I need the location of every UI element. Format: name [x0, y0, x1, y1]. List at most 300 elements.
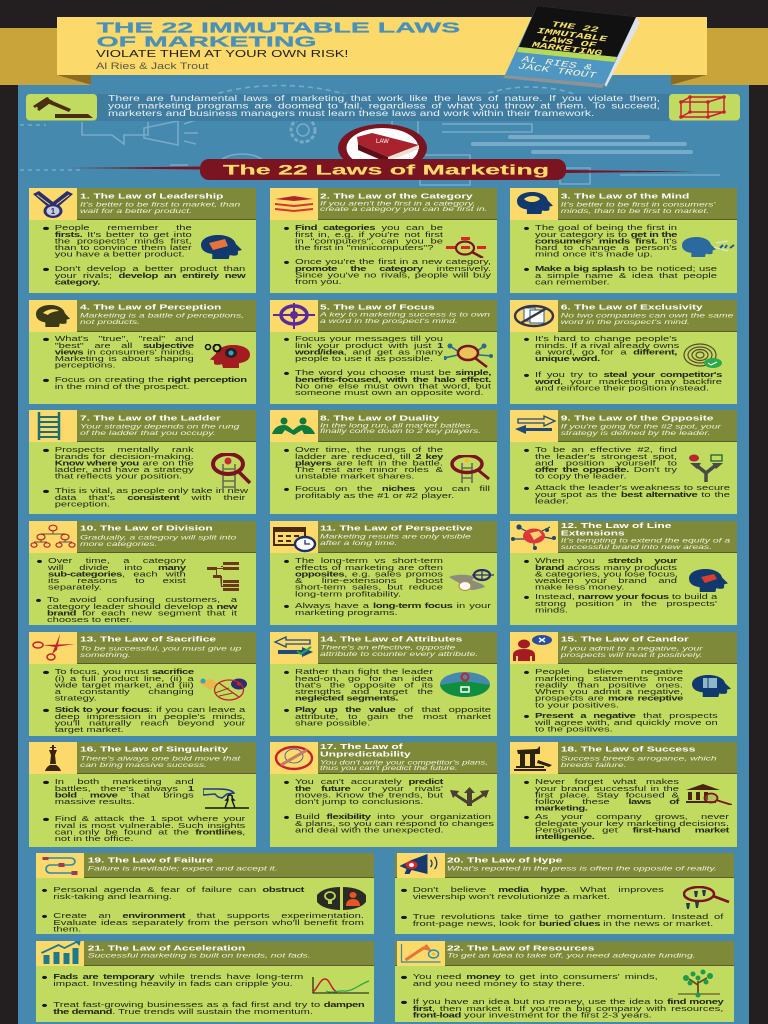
bullet text: [535, 485, 730, 505]
bullet text: [295, 370, 491, 397]
bullet text: People believe negative: [535, 668, 683, 676]
bullet text: Present a negative that prospects: [535, 713, 718, 720]
bullet text: Over time, the rungs of the: [295, 447, 443, 454]
panel: law 8: [270, 410, 497, 514]
heading: 21. The Law of Acceleration: [88, 943, 245, 952]
heading: 19. The Law of Failure: [88, 856, 213, 865]
bullet text: [295, 669, 433, 702]
section emblem: law book: [338, 124, 427, 159]
bullet text: your category is to get in the: [535, 231, 677, 239]
panel: law 18: [510, 742, 737, 847]
bullet text: attribute, to gain the most market: [295, 713, 491, 721]
bullet text: [55, 669, 194, 702]
bullet text: unique word.: [535, 356, 600, 363]
gold ribbon band: [0, 28, 91, 85]
bullet text: Find & attack the 1 spot where your: [55, 815, 245, 823]
icon: ladder: [29, 410, 77, 442]
bullet text: opposites, e.g. sales promos: [295, 571, 443, 578]
bullet text: "best" are all subjective: [55, 342, 194, 350]
tagline: [320, 422, 481, 435]
section emblem: law book: LAW: [376, 139, 389, 145]
bullet text: and position yourself to: [535, 460, 677, 468]
heading: 8. The Law of Duality: [320, 413, 439, 422]
tagline: [80, 645, 241, 659]
icon: tree chart: [207, 562, 239, 591]
heading: 12. The Law of Line: [561, 521, 671, 529]
tagline: not products.: [80, 319, 140, 326]
main title: OF MARKETING: [96, 33, 317, 50]
authors: Al Ries & Jack Trout: [96, 61, 209, 71]
icon: money tree: [678, 969, 720, 998]
bullet text: Never forget what makes: [535, 779, 679, 786]
bullet text: rival is most vulnerable. Such insights: [55, 822, 245, 830]
bullet text: [535, 225, 677, 259]
tagline: [80, 423, 240, 436]
heading: [561, 521, 671, 537]
bullet text: & plans, so you can respond to changes: [295, 820, 494, 827]
bullet text: [295, 707, 491, 727]
bullet text: leader.: [535, 497, 569, 505]
tagline: Marketing results are only visible: [320, 533, 471, 540]
bullet text: Prospects mentally rank: [55, 447, 194, 454]
tagline: successful brand into new areas.: [561, 544, 712, 551]
bullet text: People remember the: [55, 225, 192, 232]
heading: 6. The Law of Exclusivity: [561, 302, 703, 311]
bullet text: Make a big splash to be noticed; use: [535, 266, 717, 273]
heading: 10. The Law of Division: [80, 524, 213, 533]
bullet text: short-term sales, but reduce: [295, 584, 443, 592]
icon: person with bubble: [510, 632, 558, 664]
heading: 3. The Law of the Mind: [561, 191, 689, 200]
bullet text: Don't develop a better product than: [55, 266, 245, 273]
bullet text: impact. Investing heavily in fads can cripple you.: [53, 980, 293, 988]
bullet text: marketing programs.: [295, 609, 398, 617]
bullet text: When you stretch your: [535, 557, 677, 565]
bullet text: What's "true", "real" and: [55, 336, 194, 343]
bullet text: minds.: [535, 607, 568, 614]
section heading: [200, 159, 566, 180]
bullet text: word/idea, and get as many: [295, 349, 443, 357]
bullet text: Personally get first-hand market: [535, 827, 729, 835]
panel: law 5: [270, 300, 497, 404]
bullet text: its reasons to exist: [48, 578, 186, 585]
tagline: [80, 534, 236, 548]
bullet text: players are left in the battle.: [295, 460, 443, 468]
bullet text: prospects are more receptive: [535, 695, 683, 703]
heading: 17. The Law of: [320, 742, 403, 750]
bullet text: a constantly changing: [55, 688, 194, 696]
bullet text: Don't believe media hype. What improves: [413, 886, 664, 894]
tagline: wait for a better product.: [80, 207, 192, 214]
bullet text: the future or your rivals': [295, 785, 443, 793]
bullet text: in "computers", can you be: [295, 238, 443, 246]
icon: megaphone: [397, 853, 445, 878]
heading: 16. The Law of Singularity: [80, 745, 228, 754]
heading: 4. The Law of Perception: [80, 302, 221, 311]
heading: 2. The Law of the Category: [320, 191, 473, 200]
bullet text: [413, 999, 723, 1019]
bullet text: Know where you are on the: [55, 460, 194, 468]
tagline: It's better to be first to market, than: [80, 201, 240, 208]
bullet text: If you have an idea but no money, use the idea to find money: [413, 998, 723, 1006]
tagline: If you admit to a negative, your: [561, 645, 703, 652]
bullet text: [413, 914, 723, 928]
tagline: minds, than to be first to market.: [561, 207, 709, 214]
bullet text: Over time, a category: [48, 558, 186, 565]
book cover: MARKETING: [530, 41, 604, 58]
bullet text: and reinforce their position instead.: [535, 384, 709, 392]
bullet text: front-load your investment for the first 2-3 years.: [413, 1012, 652, 1019]
bullet text: you have a better product.: [55, 251, 185, 259]
bullet text: [295, 814, 491, 834]
bullet text: people to use it as possible.: [295, 356, 433, 363]
bullet text: Stick to your focus: if you can leave a: [55, 706, 245, 714]
bullet text: consumers' minds first. It's: [535, 238, 677, 246]
bullet text: [55, 779, 194, 806]
bullet text: marketing.: [535, 805, 588, 813]
tagline: more categories.: [80, 540, 157, 547]
bullet text: moves. Know the trends, but: [295, 792, 443, 800]
bullet text: [53, 913, 364, 933]
bullet text: You can't accurately predict: [295, 779, 443, 786]
bullet text: firsts. It's better to get into: [55, 231, 192, 239]
panel: law 10: [29, 521, 256, 625]
panel: law 13: [29, 632, 256, 736]
tagline: There's an effective, opposite: [320, 644, 455, 651]
bullet text: will agree with, and quickly move on: [535, 719, 718, 727]
bullet text: [295, 225, 443, 252]
icon: gear head: [204, 344, 250, 368]
bullet text: follow these laws of: [535, 799, 679, 806]
bullet text: promote the category intensively.: [295, 265, 491, 273]
bullet text: perceptions.: [55, 362, 116, 370]
panel: law 4: [29, 300, 256, 404]
heading: Unpredictability: [320, 749, 411, 758]
bullet text: category.: [55, 279, 100, 287]
intro text: your marketing programs are doomed to fail, regardless of what you throw at them. To succeed,: [108, 101, 660, 111]
bullet text: Treat fast-growing businesses as a fad first and try to dampen: [53, 1001, 364, 1009]
icon: medal: [29, 188, 77, 220]
heading: 22. The Law of Resources: [447, 943, 594, 952]
bullet text: to copy the leader.: [535, 473, 626, 481]
tagline: Failure is inevitable; expect and accept it.: [88, 866, 278, 873]
bullet text: (i) a full product line, (ii) a: [55, 675, 194, 683]
heading: 7. The Law of the Ladder: [80, 413, 221, 422]
bullet text: Focus your messages till you: [295, 336, 443, 343]
bullet text: long-term profitability.: [295, 591, 401, 598]
bullet text: [55, 336, 194, 370]
tagline: [320, 760, 488, 772]
icon: flow arrows: [36, 853, 84, 878]
bullet text: in the mind of the prospect.: [55, 383, 190, 391]
bullet text: will divide into many: [48, 564, 186, 572]
tagline: something.: [80, 652, 131, 659]
tagline: [560, 423, 722, 436]
tagline: No two companies can own the same: [561, 313, 733, 320]
tagline: [560, 537, 730, 551]
panel: law 21: [36, 941, 374, 1022]
bullet text: deep impression in people's minds,: [55, 713, 245, 721]
tagline: [561, 313, 733, 326]
bullet text: them.: [53, 926, 81, 933]
panel: law 11: [270, 521, 497, 625]
bullet text: perception.: [55, 501, 110, 508]
bullet text: your rivals; develop an entirely new: [55, 272, 245, 280]
icon: magnifier ladder: [211, 453, 252, 493]
icon: attribute arrows: [270, 632, 318, 664]
bullet text: The goal of being the first in: [535, 225, 677, 232]
bullet text: your spot as the best alternative to the: [535, 491, 730, 498]
bullet text: a simple name & idea that people: [535, 272, 717, 280]
bullet text: mind once it's made up.: [535, 251, 653, 259]
heading: 20. The Law of Hype: [447, 856, 562, 865]
icon: magnifier with nodes: [444, 344, 493, 368]
bullet text: As your company grows, never: [535, 814, 729, 821]
intro text: [108, 94, 660, 118]
heading text: The 22 Laws of Marketing: [223, 162, 549, 177]
bullet text: No one else must own that word, but: [295, 383, 491, 391]
bullet text: first in, e.g. if you're not first: [295, 231, 443, 239]
bullet text: benefits-focused, with the halo effect.: [295, 376, 491, 384]
tagline: [320, 312, 490, 325]
bullet text: and deal with the unexpected.: [295, 826, 444, 834]
bullet text: minds. If a rival already owns: [535, 342, 679, 350]
bullet text: your brand successful in the: [535, 785, 679, 793]
icon: bank magnifier: [686, 784, 732, 805]
bullet text: & categories, you lose focus,: [535, 571, 678, 578]
bullet text: Create an environment that supports experimentation.: [53, 912, 364, 920]
bullet text: link your product with just 1: [295, 342, 443, 350]
section heading lines: [72, 166, 693, 173]
bullet text: [55, 225, 192, 259]
bullet text: [295, 486, 490, 499]
icon: fingerprint: [683, 343, 722, 368]
bullet text: offer the opposite. Don't try: [535, 467, 677, 474]
bullet text: risk-taking and learning.: [53, 893, 172, 900]
bullet text: unstable market shares.: [295, 473, 414, 481]
bullet text: the demand. True trends will sustain the momentum.: [53, 1008, 313, 1016]
panel: law 20: [395, 853, 734, 934]
bullet text: Find categories you can be: [295, 225, 443, 232]
heading: 11. The Law of Perspective: [320, 524, 473, 533]
bullet text: [295, 336, 443, 363]
tagline: You don't write your competitor's plans,: [320, 759, 488, 766]
bullet text: battles, there's always 1: [55, 785, 194, 793]
tagline: [561, 756, 717, 768]
icon: hand moving pawn: [203, 788, 249, 810]
intro text: marketers and business managers must learn these laws and work within their framework.: [108, 109, 594, 118]
bullet text: the first in "minicomputers"?: [295, 245, 434, 252]
intro text: There are fundamental laws of marketing that work like the laws of nature. If you violate them,: [108, 94, 660, 103]
bullet text: [53, 1002, 364, 1015]
bullet text: brands for decision-making.: [55, 453, 194, 461]
bullet text: [413, 974, 658, 987]
bullet text: The long-term vs short-term: [295, 557, 443, 565]
bullet text: wide target market, and (iii): [55, 682, 194, 689]
bullet text: first place. Stay focused &: [535, 792, 679, 800]
tagline: What's reported in the press is often the opposite of reality.: [447, 866, 717, 873]
bullet text: [535, 558, 677, 591]
tagline: [320, 533, 471, 547]
bullet text: To focus, you must sacrifice: [55, 668, 194, 676]
heading: 5. The Law of Focus: [320, 302, 435, 311]
icon: idea and person: [317, 887, 366, 910]
tagline: A key to marketing success is to own: [320, 312, 490, 319]
bullet text: [535, 669, 683, 709]
bullet text: [55, 377, 247, 390]
icon: no scattered focus: [198, 678, 247, 701]
bullet text: brand for each new segment that it: [47, 609, 237, 617]
tagline: To be successful, you must give up: [80, 645, 241, 652]
bullet text: viewership won't revolutionize a market.: [413, 893, 610, 900]
bullet text: delegate your key marketing decisions.: [535, 820, 729, 828]
bullet text: [55, 707, 245, 734]
bullet text: [295, 779, 443, 806]
panel: law 6: [510, 300, 737, 404]
intro band: [97, 94, 669, 120]
icon: division tree: [29, 521, 77, 553]
bullet text: [55, 266, 245, 286]
tagline: attribute to counter every attribute.: [320, 651, 478, 658]
bullet text: [48, 558, 186, 592]
bullet text: views in consumers' minds.: [55, 349, 194, 357]
bullet text: [535, 447, 677, 481]
heading: 14. The Law of Attributes: [320, 634, 462, 643]
bullet text: To avoid confusing customers, a: [47, 596, 237, 604]
icon: two players: [270, 410, 318, 442]
panel: law 3: [510, 188, 737, 293]
bullet text: intelligence.: [535, 834, 594, 841]
tagline: Success breeds arrogance, which: [561, 755, 717, 762]
bullet text: [55, 488, 245, 508]
bullet text: not in the office.: [55, 835, 133, 843]
tagline: a word in the prospect's mind.: [320, 318, 458, 325]
bullet text: [53, 974, 303, 987]
icon: target: [270, 300, 318, 332]
bullet text: readily than positive ones.: [535, 682, 683, 689]
bullet text: ladder, and have a strategy: [55, 467, 194, 474]
bullet text: If you try to steal your competitor's: [535, 371, 722, 379]
heading: 15. The Law of Candor: [561, 634, 689, 643]
tagline: [560, 201, 716, 214]
tagline: Successful marketing is built on trends, not fads.: [88, 952, 311, 959]
bullet text: first, then market it. If you're a big company with resources,: [413, 1005, 723, 1013]
tagline: It's tempting to extend the equity of a: [561, 537, 730, 544]
bullet text: It's hard to change people's: [535, 336, 677, 343]
bullet text: [295, 558, 443, 598]
panel: law 9: [510, 410, 737, 514]
tagline: [320, 644, 478, 658]
subtitle: VIOLATE THEM AT YOUR OWN RISK!: [96, 49, 348, 60]
book cover: [503, 6, 640, 88]
icon: head with splash: [682, 237, 734, 257]
bullet text: don't jump to conclusions.: [295, 799, 423, 806]
main title: THE 22 IMMUTABLE LAWS: [96, 19, 460, 36]
bullet text: strengths and target the: [295, 688, 433, 696]
bullet text: [295, 603, 491, 616]
tagline: [560, 645, 703, 659]
bullet text: head-on, go for an idea: [295, 675, 433, 683]
bullet text: to your positives.: [535, 702, 619, 709]
bullet text: to the positives.: [535, 726, 613, 734]
bullet text: [55, 447, 194, 481]
bullet text: Evaluate ideas separately from the person who'll benefit from: [53, 919, 364, 927]
icon: red cube: [669, 94, 740, 120]
icon: head: [510, 188, 558, 220]
bullet text: Play up the value of that opposite: [295, 706, 491, 714]
book cover: THE 22: [549, 21, 600, 35]
bullet text: Since you've no rivals, people will buy: [295, 272, 491, 280]
icon: branching arrows: [450, 787, 489, 806]
icon: medal: 1: [51, 207, 56, 216]
tagline: [80, 201, 240, 214]
bullet text: brand across many products: [535, 564, 677, 572]
bullet text: [47, 597, 237, 623]
bullet text: a word, go for a different,: [535, 349, 677, 357]
icon: broken temple: [510, 742, 558, 774]
bullet text: bold move that brings: [55, 792, 194, 800]
bullet text: Attack the leader's weakness to secure: [535, 484, 730, 492]
bullet text: Marketing is about shaping: [55, 356, 194, 363]
icon: head: [689, 569, 728, 592]
bullet text: The word you choose must be simple,: [295, 370, 491, 377]
bullet text: profitably as the #1 or #2 player.: [295, 492, 454, 499]
tagline: word in the prospect's mind.: [561, 319, 690, 326]
bullet text: This is vital, as people only take in new: [55, 487, 248, 495]
tagline: [80, 312, 244, 326]
icon: magnifier ladder: [450, 455, 490, 483]
tagline: create a category you can be first in.: [320, 206, 488, 213]
tagline: thus you can't predict the future.: [320, 765, 458, 772]
bullet text: sub-categories, each with: [48, 571, 186, 579]
bullet text: Rather than fight the leader: [295, 668, 433, 676]
bullet text: [535, 779, 679, 813]
bullet text: weaken your brand and: [535, 577, 677, 585]
bullet text: from you.: [295, 279, 342, 286]
tagline: [80, 756, 240, 768]
panel: law 1: [29, 188, 256, 293]
bullet text: [535, 266, 717, 286]
icon: idea funding chart: [397, 941, 445, 966]
bullet text: [53, 887, 304, 900]
bullet text: target market.: [55, 726, 124, 734]
heading: 1. The Law of Leadership: [80, 191, 223, 200]
icon: fork arrows: [689, 454, 723, 482]
tagline: finally come down to 2 key players.: [320, 428, 481, 435]
icon: gavel: [26, 94, 97, 120]
bullet text: effects of marketing are often: [295, 564, 443, 572]
icon: fad vs trend chart: [310, 977, 370, 995]
tagline: If you aren't the first in a category,: [320, 200, 475, 207]
icon: head: [201, 235, 242, 259]
bullet text: [413, 887, 664, 900]
book cover: LAWS OF: [539, 35, 598, 50]
book cover: JACK TROUT: [516, 62, 598, 81]
heading: 9. The Law of the Opposite: [561, 413, 713, 422]
bullet text: In both marketing and: [55, 779, 194, 786]
icon: growth bars: [36, 941, 84, 966]
icon: magnifier footprints: [683, 886, 730, 910]
tagline: breeds failure.: [561, 761, 627, 768]
tagline: If you're going for the #2 spot, your: [561, 423, 721, 430]
bullet text: [535, 814, 729, 841]
book cover: AL RIES &: [520, 55, 594, 73]
bullet text: chooses to enter.: [47, 616, 132, 624]
bullet text: True revolutions take time to gather momentum. Instead of: [413, 914, 723, 921]
bullet text: neglected segments.: [295, 695, 398, 703]
book cover: IMMUTABLE: [535, 27, 609, 44]
bullet text: [535, 713, 718, 733]
